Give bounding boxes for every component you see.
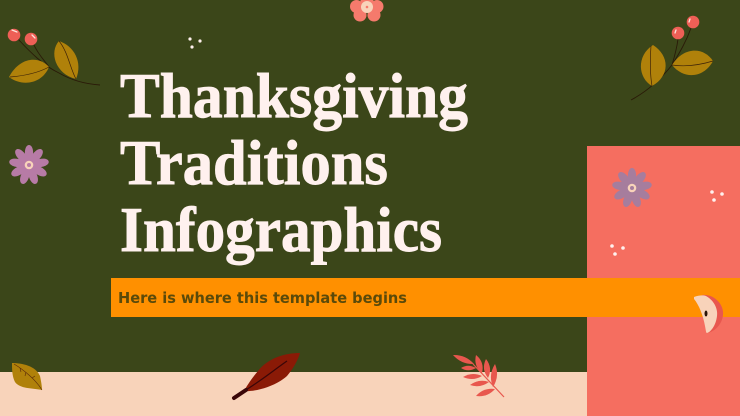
icon: purple flower on coral: [612, 168, 652, 208]
icon: coral fern: [453, 355, 504, 397]
panel: coral block: [587, 146, 740, 416]
icon: flower top centre: [350, 0, 384, 22]
panel: peach floor band: [0, 372, 740, 416]
icon: red leaf bottom: [234, 353, 300, 398]
icon: sparkle dots coral right: [710, 190, 724, 202]
icon: sparkle dots coral left: [610, 244, 625, 256]
title: [120, 61, 468, 265]
panel: orange subtitle band: [111, 278, 740, 317]
title: Thanksgiving: [120, 61, 468, 131]
icon: pink flower left: [9, 145, 49, 185]
icon: golden leaf bottom left: [12, 363, 42, 390]
icon: sparkle dots top: [188, 37, 202, 49]
icon: berry sprig top right: [631, 16, 713, 100]
title: Infographics: [120, 195, 442, 265]
title: Traditions: [120, 128, 388, 198]
icon: berry sprig top left: [8, 29, 100, 85]
subtitle: Here is where this template begins: [118, 289, 407, 307]
icon: apple slice: [694, 295, 723, 333]
